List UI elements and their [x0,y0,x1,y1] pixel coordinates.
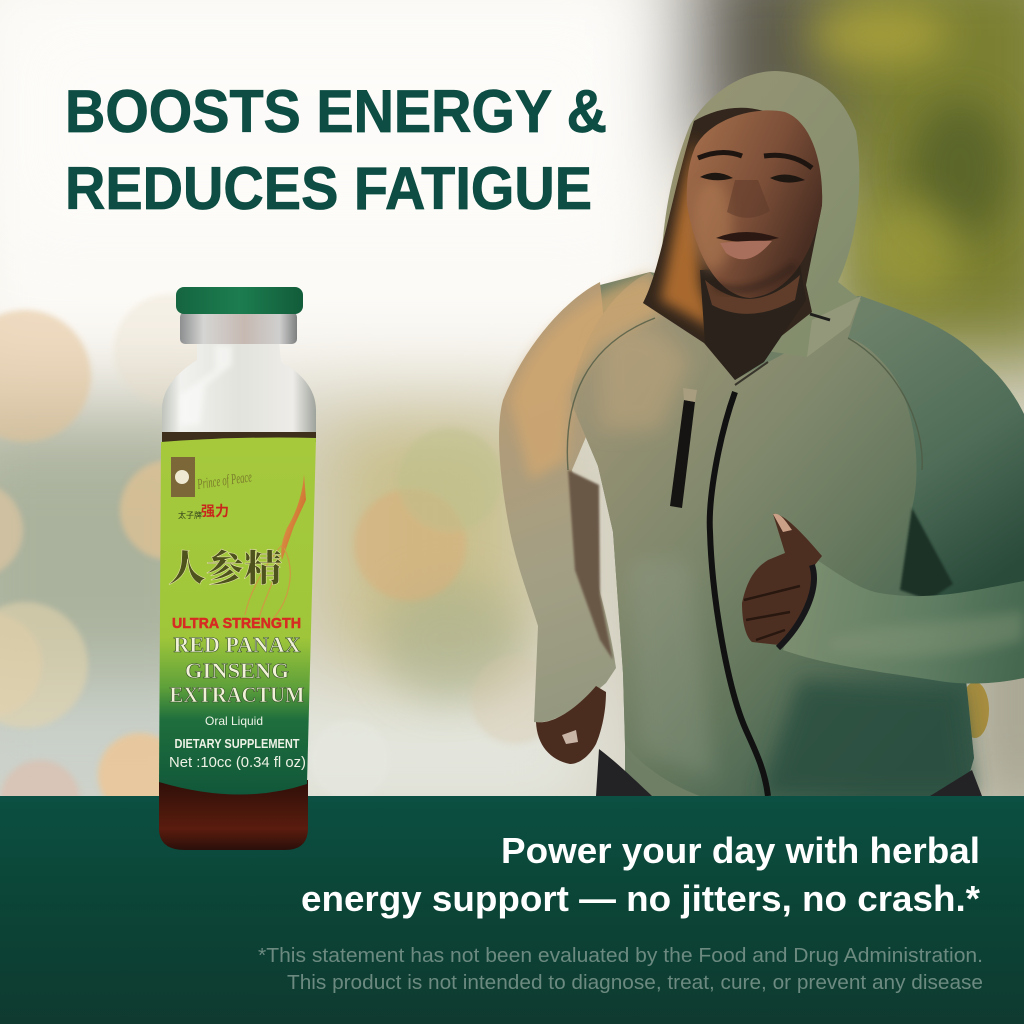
runner: thumb loop cuff [778,565,814,648]
heading [65,78,607,222]
label: Chinese product name: 人参精 [168,538,282,592]
label: ultra strength: ULTRA STRENGTH [172,615,301,632]
tagline [301,830,980,919]
runner: lower torso shading [760,680,975,796]
runner: torso [570,272,974,796]
runner: underarm dark [900,508,953,600]
label: net volume: Net :10cc (0.34 fl oz) [169,754,306,771]
runner: left arm [499,282,616,722]
disclaimer: *This statement has not been evaluated by the Food and Drug Administration. [258,945,983,967]
product bottle [159,287,316,850]
runner: arm inner panel [568,470,613,660]
bottle: silver collar [180,312,297,344]
bottle: label [159,438,316,795]
disclaimer: This product is not intended to diagnose, treat, cure, or prevent any disease [287,972,983,994]
runner: chest pocket [670,400,695,508]
runner: shorts [596,749,982,796]
runner: silhouette base [570,272,1024,796]
label: product name [170,632,305,707]
label: brand name: Prince of Peace [196,469,253,493]
label: dietary supplement: DIETARY SUPPLEMENT [174,736,300,751]
runner: face [687,110,822,298]
runner: right upper arm [848,296,1024,600]
runner: right hand [742,514,822,645]
heading: REDUCES FATIGUE [65,155,592,222]
runner: hood interior [643,108,822,380]
runner photo [499,71,1024,796]
label: brand emblem [171,457,195,497]
disclaimer [258,945,983,994]
tagline: energy support — no jitters, no crash.* [301,878,980,919]
bottle: glass [162,342,316,440]
runner: hood [643,71,861,357]
bottle: green cap [176,287,303,314]
runner: seams [567,318,922,470]
label: ginseng root [245,474,306,625]
runner: amber hip patch [961,682,989,738]
bottom band [0,796,1024,1024]
label: oral liquid: Oral Liquid [205,714,263,728]
runner: left hand [536,686,606,764]
bokeh lights [0,294,559,840]
runner: zipper [710,392,768,796]
product bottle: 强力 [201,501,229,521]
runner: forearm [783,560,1024,684]
tagline: Power your day with herbal [501,830,980,871]
label: product name: EXTRACTUM [170,682,305,707]
runner: hood gather [807,296,861,357]
runner: shoulder glow [510,274,665,480]
label: product name: RED PANAX [174,632,301,657]
heading: BOOSTS ENERGY & [65,78,607,145]
bottle: amber liquid [159,780,308,850]
runner: neck and shirt [700,265,806,380]
label: product name: GINSENG [185,658,289,683]
label: small Chinese text: 太子牌 [178,510,202,521]
